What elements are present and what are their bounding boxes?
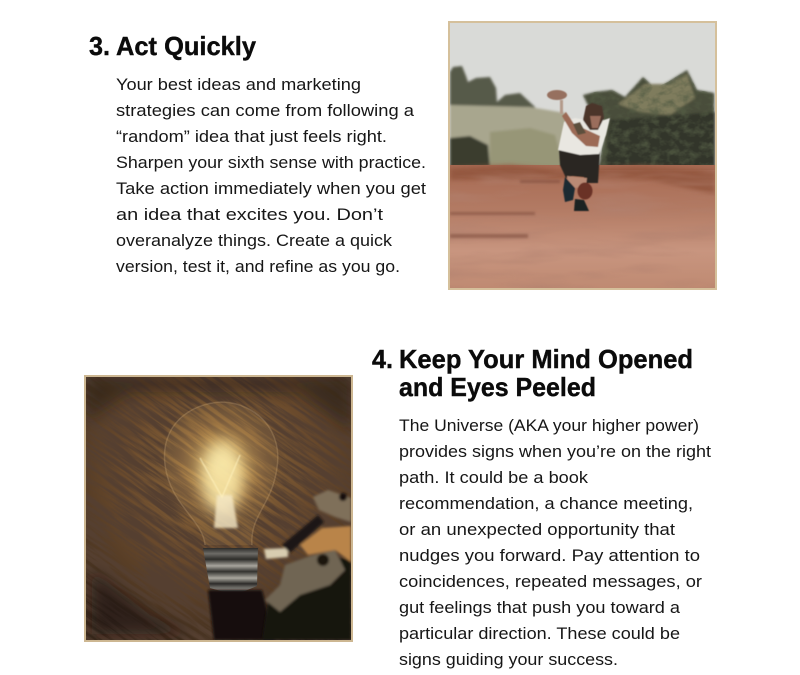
photo: man running on a dirt road [448, 21, 717, 290]
text block: keep your mind opened body: particular direction. These could be [399, 625, 680, 643]
text block: keep your mind opened body: nudges you forward. Pay attention to [399, 547, 700, 565]
text block: act quickly body: Take action immediately when you get [116, 180, 426, 198]
text block: keep your mind opened body: coincidences, repeated messages, or [399, 573, 703, 591]
text block: act quickly body: strategies can come from following a [116, 102, 415, 120]
heading: 4. Keep Your Mind Opened and Eyes Peeled: 4. [372, 344, 393, 374]
text block: keep your mind opened body: The Universe (AKA your higher power) [399, 417, 699, 435]
heading: 4. Keep Your Mind Opened and Eyes Peeled: Keep Your Mind Opened [399, 344, 693, 374]
text block: act quickly body: “random” idea that just feels right. [116, 128, 387, 146]
text block: act quickly body: overanalyze things. Create a quick [116, 232, 393, 250]
text block: act quickly body: Sharpen your sixth sense with practice. [116, 154, 426, 172]
heading: 4. Keep Your Mind Opened and Eyes Peeled: and Eyes Peeled [399, 372, 596, 402]
text block: act quickly body: an idea that excites you. Don’t [116, 206, 383, 224]
text block: keep your mind opened body: path. It could be a book [399, 469, 589, 487]
heading: 3. Act Quickly: Act Quickly [116, 31, 257, 61]
text block: keep your mind opened body [399, 417, 711, 669]
text block: act quickly body: Your best ideas and marketing [116, 76, 361, 94]
bulb glow [164, 401, 280, 545]
text block: keep your mind opened body: signs guiding your success. [399, 651, 618, 669]
text block: keep your mind opened body: gut feelings that push you toward a [399, 599, 681, 617]
text block: act quickly body [116, 76, 426, 276]
text block: act quickly body: version, test it, and refine as you go. [116, 258, 400, 276]
runner [547, 90, 610, 211]
heading: 4. Keep Your Mind Opened and Eyes Peeled [372, 344, 693, 402]
bulb screw base [203, 548, 275, 640]
keys [262, 490, 351, 640]
photo: glowing light bulb and old keys on wood [84, 375, 353, 642]
text block: keep your mind opened body: recommendation, a chance meeting, [399, 495, 693, 513]
text block: keep your mind opened body: provides signs when you’re on the right [399, 443, 711, 461]
text block: keep your mind opened body: or an unexpected opportunity that [399, 521, 675, 539]
heading: 3. Act Quickly: 3. [89, 31, 110, 61]
